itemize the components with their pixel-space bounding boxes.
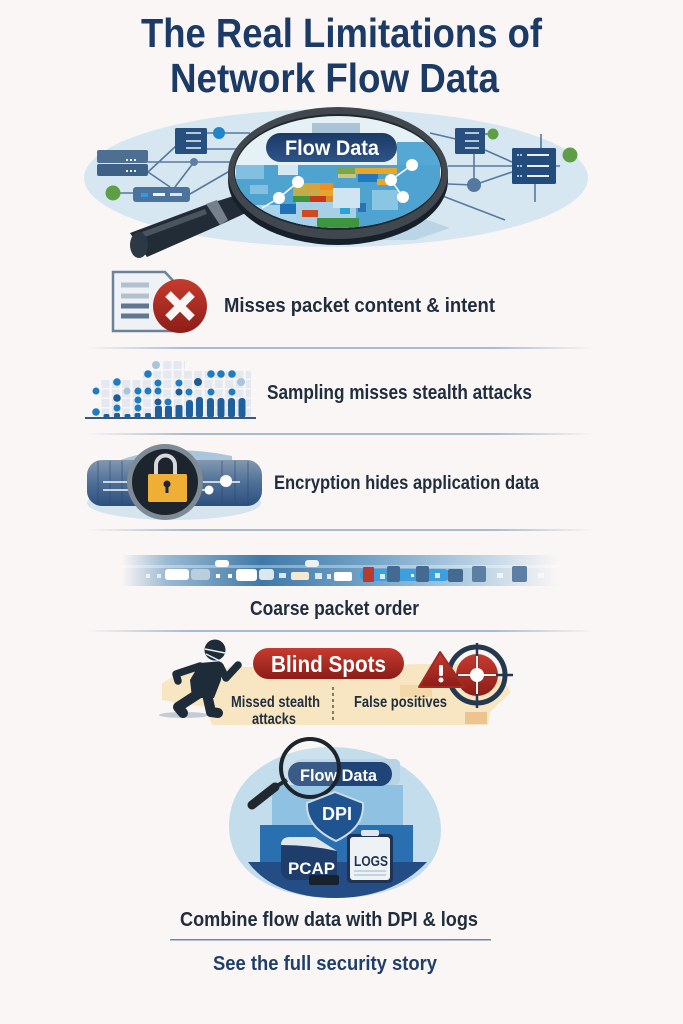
- flow data pill small: Flow Data: [300, 766, 378, 785]
- icon: document with red X: [113, 272, 207, 333]
- text: missed stealth attacks: [231, 694, 320, 728]
- icon: right switch panel: [455, 128, 485, 154]
- hero illustration: network under magnifier: [84, 107, 588, 258]
- icon: PCAP drive: [281, 837, 339, 885]
- icon: thief: [159, 640, 238, 718]
- text: encryption: Encryption hides application data: [274, 473, 539, 494]
- icon: rack server: [97, 150, 148, 176]
- blind spots pill: Blind Spots: [271, 651, 386, 677]
- text: false positives: False positives: [354, 694, 447, 711]
- icon: large server panel: [512, 148, 556, 184]
- flow data pill small: [288, 762, 392, 786]
- flow data pill: Flow Data: [285, 137, 379, 160]
- beige band: [162, 663, 511, 725]
- icon: LOGS clipboard: LOGS: [354, 853, 388, 870]
- text: coarse packet order: Coarse packet order: [250, 598, 419, 620]
- icon: packet strip: [122, 555, 558, 586]
- text: combine flow data: Combine flow data with DPI & logs: [180, 909, 478, 931]
- title: [141, 10, 542, 101]
- text: see the full security story: See the full security story: [213, 953, 438, 975]
- icon: LOGS clipboard: [347, 830, 393, 883]
- title: Network Flow Data: [170, 55, 500, 101]
- text: missed stealth attacks: attacks: [252, 711, 296, 728]
- icon: sampled bars: [85, 361, 256, 419]
- icon: small magnifier: [252, 739, 339, 805]
- title: The Real Limitations of: [141, 10, 542, 56]
- text: sampling: Sampling misses stealth attacks: [267, 382, 532, 404]
- icon: DPI shield: DPI: [322, 804, 352, 824]
- text: missed stealth attacks: Missed stealth: [231, 694, 320, 711]
- icon: encrypted tunnel with padlock: [87, 444, 262, 520]
- panel: blind spots: [159, 640, 513, 728]
- icon: combined data stack: [229, 739, 441, 898]
- icon: magnifying glass: [130, 107, 450, 258]
- icon: left switch panel: [175, 128, 207, 154]
- icon: target: [449, 643, 513, 708]
- icon: appliance: [133, 187, 190, 202]
- icon: DPI shield: [307, 792, 363, 841]
- icon: warning triangle: [419, 652, 464, 687]
- icon: PCAP drive: PCAP: [288, 859, 335, 878]
- flow data pill: [266, 133, 397, 162]
- text: misses packet content: Misses packet content & intent: [224, 295, 495, 317]
